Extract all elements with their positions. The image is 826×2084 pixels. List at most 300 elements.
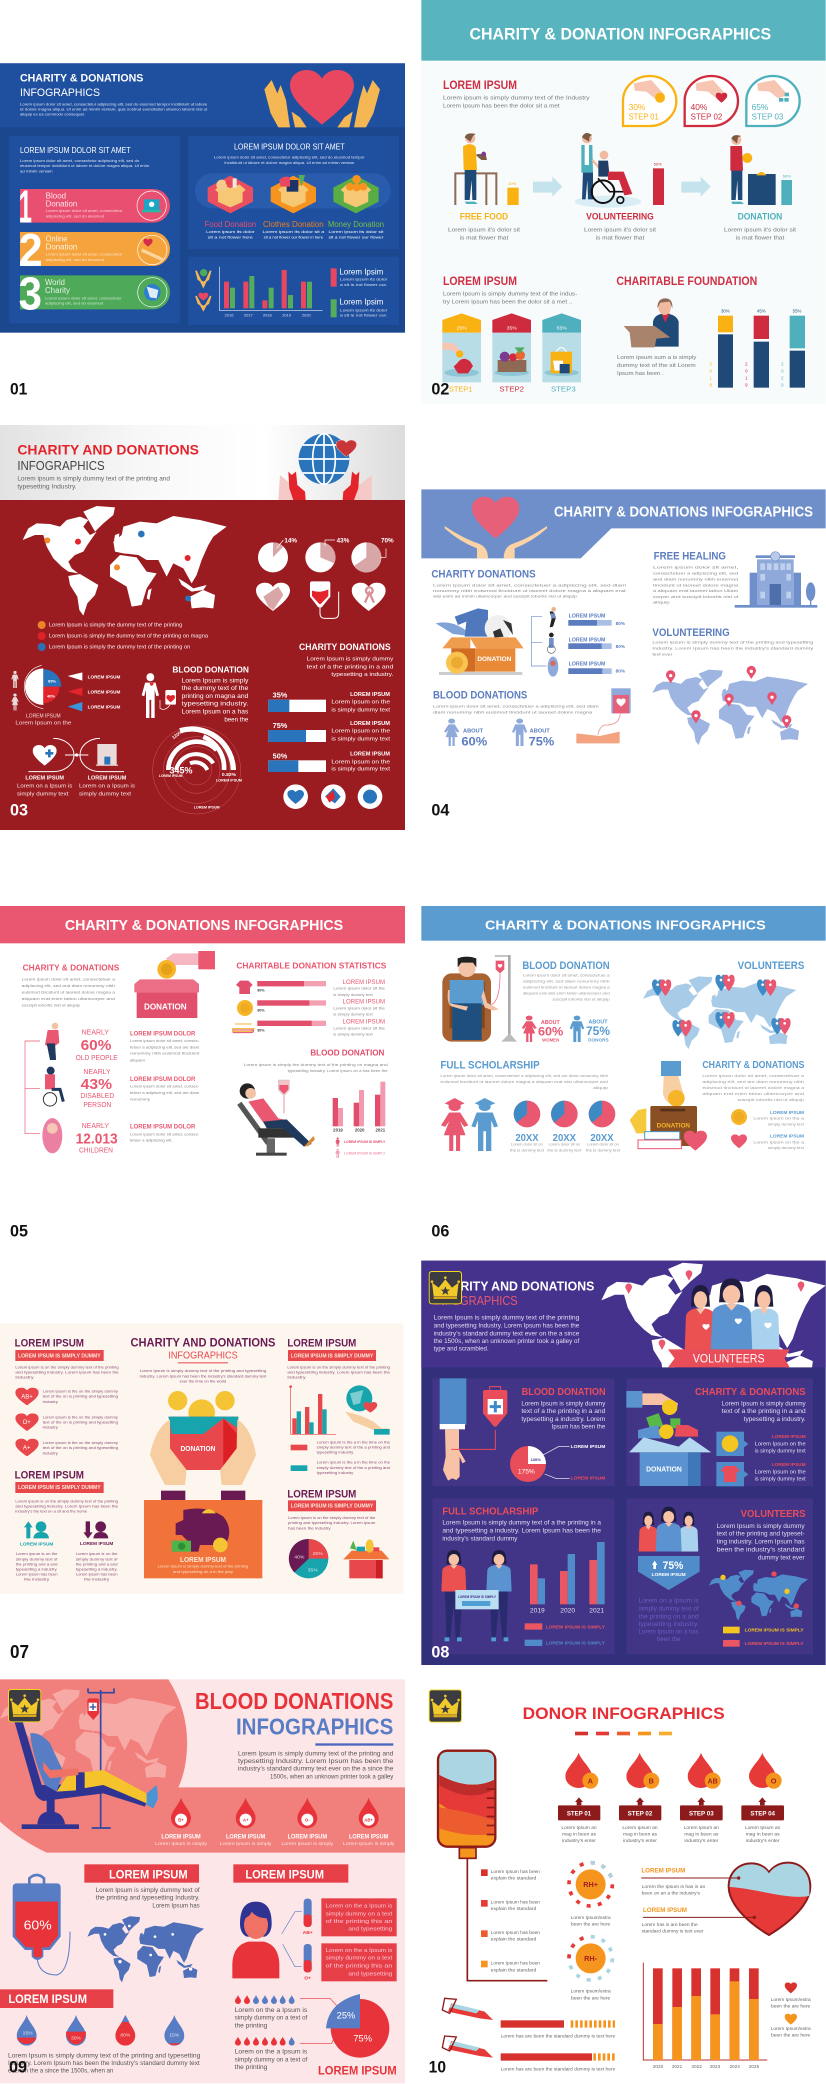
pie charts with years: Lorem dolor sit on [511,1143,543,1147]
text block: charity and donations: suscipit lobortis nisl ut aliquip [22,1002,81,1007]
blood type drops: AB+ [364,1817,374,1822]
half pie with persons: Lorem Ipsum on the [15,721,71,727]
figure: volunteering [575,133,664,208]
card: volunteers: LOREM IPSUM IS SIMPLY [745,1641,804,1647]
figure: free food [455,133,519,205]
card: blood donation: BLOOD DONATION [522,1387,606,1398]
step badges: STEP 02 [691,111,723,121]
foundation text: dummy text of the sit Lorem [617,363,696,369]
pill: online donation: adipiscing elit, sed do eiusmod [46,258,104,262]
blood type drops: LOREM IPSUM [288,1834,327,1840]
captions for the three activities: DONATION [738,212,783,222]
progress bars: 75% [273,721,288,730]
orange card with piggy bank [144,1491,262,1578]
three stats with bracket: 80% [616,621,626,626]
donation captions: Lorem ipsum its dolor sit [328,230,383,234]
coin and heart legend: Lorem ipsum on the a [753,1117,805,1121]
text block: charity and donations [22,962,120,1007]
number 07: 07 [10,1642,29,1662]
three stats with bracket: LOREM IPSUM [569,662,606,668]
text block: lorem ipsum lower: LOREM IPSUM [443,274,517,288]
drop rows and pie chart: LOREM IPSUM [318,2064,397,2077]
title [523,1704,725,1735]
bar chart: 2018 [263,313,273,318]
text block: blood donation: printing on magna and [182,694,248,700]
text block: lorem ipsum lower [443,274,577,305]
banner with figure: lorem ipsum [232,1864,397,1981]
card: full scholarship: and typesetting a industry. Lorem Ipsum has been the [442,1529,602,1535]
stats text: NEARLY [82,1121,109,1130]
bar chart with legend: LOREM IPSUM IS SIMPLY [344,1140,386,1144]
icon: globe with heart and hands [278,434,372,500]
three stats with bracket: 80% [616,644,626,649]
step 1 house [442,313,481,394]
right section: bar chart: industry [287,1375,306,1380]
pill: blood donation: Blood [46,191,66,200]
pill: online donation: 2 [19,224,43,276]
text block: free healing: FREE HEALING [654,550,726,562]
blood type steps: A [588,1776,594,1785]
pill: online donation: Lorem ipsum dolor sit amet, consectetur [46,253,123,257]
icons: hands holding globe and heart [196,269,211,310]
card: charity and donations [626,1378,813,1486]
text block: free healing: Lorem ipsum dolor sit amet, [653,565,738,570]
blood type drops: LOREM IPSUM [226,1834,265,1840]
pie charts with years: 20XX [515,1133,539,1144]
bar chart: LOREM IPSUM IS SIMPLY [546,1624,606,1630]
bag legend: explain the standard [491,1906,537,1911]
donation captions: Money Donation [328,220,384,229]
dolor text blocks: LOREM IPSUM DOLOR [130,1076,195,1083]
left section: donors: industry's the text on a sit and the home [15,1509,88,1514]
card: volunteers: been the [657,1637,681,1643]
bar chart: 2019 [530,1608,545,1615]
text block: charity and donations: aliquam erat enim tation ullamcorper and [22,996,115,1001]
card: full scholarship [432,1498,615,1654]
dolor text blocks: nonummy [130,1097,150,1102]
card: volunteers: typesetting industry. [639,1622,699,1628]
chart legend: been the are here [771,2033,811,2038]
radial chart: 345% [170,765,192,775]
stacked bars: 1 [709,375,712,380]
banner with figure: lorem ipsum: AB+ [303,1930,313,1936]
chart legend: Lorem Ipsum/extra [771,1997,811,2002]
card: blood donation: 175% [518,1468,535,1475]
progress bars: LOREM IPSUM [350,751,390,757]
drop rows and pie chart: Lorem on the a Ipsum is [235,2049,307,2055]
bar chart with legend [333,1082,386,1158]
banner with drops: lorem ipsum: Industry. Lorem Ipsum has been the Industry's standard dummy text [8,2061,200,2067]
left section: blood types: Lorem ipsum is the on the simply dummy [43,1389,118,1394]
left section: blood types: and typesetting industry. Lorem Ipsum has been the [15,1369,120,1374]
text block: charity and donations: adipiscing elit, sed and diam nonummy nibh [22,983,115,988]
bar chart with legend: 2021 [376,1128,386,1133]
donation captions: sit a not flower our flower [328,235,385,239]
text block: full scholarship [440,1060,608,1090]
blood type steps: STEP 03 [689,1811,714,1818]
statistics: LOREM IPSUM [343,1019,385,1026]
left section: blood types: text of the on is printing and typesetting [43,1445,118,1450]
chart legend: been the are here [771,2004,811,2009]
donation captions: Lorem ipsum its dolor [206,230,256,234]
blood type steps: Lorem Ipsum an [622,1825,658,1830]
half pie with persons: 69% [48,679,56,684]
blood type steps: mag in been as [684,1832,719,1837]
blood type drops: O- [305,1817,310,1822]
bag legend: Lorem Ipsum has been [491,1869,540,1874]
header: industry's standard dummy text ever on the a since [434,1331,580,1337]
card: blood donation [432,1378,615,1486]
heart and hospital connector [17,738,135,798]
orange card with piggy bank: and typesetting on a in the play [173,1570,233,1574]
header [421,1260,826,1368]
left section: blood types [15,1338,120,1456]
text block: charity and donations: CHARITY & DONATIONS [23,962,120,972]
right section: pie chart and box: printing and typesetting industry. Lorem ipsum [288,1520,376,1525]
text block: charity donations [431,569,627,599]
pill: world charity: World [45,278,65,287]
right column heading: incididunt ut labore et dolore magna aliqua. Ut enim ad minim veniam [224,160,355,165]
left section: blood types: Lorem ipsum is on the simply dummy text of the printing [15,1364,119,1369]
header: the 1500s, when an unknown printer took a galley of [434,1339,580,1345]
number 09: 09 [9,2058,27,2077]
donor percentages: ABOUT [589,1019,608,1025]
icon: hospital [735,552,817,608]
right section: bar chart [287,1338,391,1475]
captions for the three activities: FREE FOOD [460,212,508,222]
arrow [681,177,711,197]
chart legend: Lorem Ipsum/extra [771,2026,811,2031]
bar chart: 2016 [225,313,234,318]
dolor text blocks [130,1031,200,1143]
statistics: LOREM IPSUM [343,979,385,986]
left section: donors: simply dummy text of [16,1556,58,1561]
figures: graduates [441,1098,498,1151]
half pie with persons: 40% [47,693,55,698]
right section: bar chart: LOREM IPSUM [287,1338,356,1350]
left section: blood types: industry [15,1375,34,1380]
icon: heart with level and callouts [641,1863,810,1935]
progress bars: LOREM IPSUM [350,692,390,698]
banner with figure: lorem ipsum: LOREM IPSUM [245,1867,324,1881]
half pie with persons: LOREM IPSUM [88,690,120,696]
text block: charity and donations: suscipit lobortis nisl ut aliquip [737,1098,804,1102]
heart and hospital connector: Lorem on a Ipsum is [79,784,135,790]
figures: three volunteers with ribbon: VOLUNTEERS [693,1352,764,1366]
drop rows and pie chart: 75% [353,2033,372,2043]
chart legend [331,267,388,318]
bar chart: LOREM IPSUM IS SIMPLY [546,1641,606,1647]
right section: pie chart and box: Lorem ipsum is on the simply dummy text of the [288,1515,376,1520]
right section: bar chart: LOREM IPSUM IS SIMPLY DUMMY [291,1353,374,1359]
radial chart: LOREM IPSUM [159,774,183,778]
left section: blood types: LOREM IPSUM [15,1338,84,1350]
text block: volunteering: industry. Lorem Ipsum has been the industry's standard dummy [652,646,813,651]
stacked bars: 9 [745,382,748,387]
text block: free healing: and diam nonummy nibh euismod [653,576,738,581]
text block: blood donation: been the [224,717,249,723]
stacked bar chart: 2025 [749,2064,760,2069]
figure: man in armchair with drip [442,955,517,1042]
left section: blood types: A+ [23,1445,31,1451]
icon: donation box: DONATION [477,656,512,663]
captions for the three activities: Lorem ipsum it's dolor sit [724,228,796,234]
statistics: is simply dummy text [333,1012,373,1016]
blood type drops: LOREM IPSUM [161,1834,201,1840]
foundation text [617,355,697,377]
bar chart: 2020 [560,1608,575,1615]
banner with drops: lorem ipsum: LOREM IPSUM [8,1992,87,2006]
center title: ever the time on the world [180,1378,226,1383]
center title: Lorem Ipsum is simply dummy text of the printing and typesetting [140,1368,266,1373]
icon: donation box with hand: DONATION [144,1001,187,1011]
figure: free food: 20% [508,181,517,186]
icon: heart with level and callouts: Lorem the Ipsum is has is an [642,1884,706,1889]
captions for the three activities: VOLUNTEERING [586,212,654,222]
bar chart: 2020 [302,313,312,318]
title: 1500s, when an unknown printer took a galley [270,1774,393,1780]
header: INFOGRAPHICS [434,1294,518,1308]
blood type steps: STEP 02 [628,1811,653,1818]
banner with figure: lorem ipsum: of the printing this an [326,1963,392,1969]
right section: pie chart and box: LOREM IPSUM [287,1488,356,1500]
left column heading [20,145,150,174]
header: Lorem Ipsum is simply dummy text of the printing [434,1315,579,1321]
icon: heart with level and callouts: LOREM IPSUM [643,1907,687,1914]
dolor text blocks: Lorem ipsum dolor sit amet, consec- [130,1084,200,1089]
text block: blood donation: aliquam erat wisi enim tation ullamcorper and [523,992,610,996]
panel 06: charity and donations, sky blue [421,906,826,1241]
RH plus and minus markers: RH- [584,1954,598,1963]
left section: donors: LOREM IPSUM [80,1541,113,1547]
banner with figure: lorem ipsum: and typesetting [348,1971,392,1977]
header: CHARITY & DONATIONS INFOGRAPHICS [65,918,343,934]
blood type steps: AB [708,1776,718,1785]
card: blood donation: typesetting a industry. Lorem [521,1417,605,1423]
card: full scholarship: Lorem Ipsum is simply dummy text of a the printing in a [442,1521,602,1527]
card: charity and donations: Lorem Ipsum on the [755,1442,806,1448]
step 3 house: 55% [557,326,567,332]
icon: heart with level and callouts: Lorem has is are been the [642,1922,698,1927]
title [20,73,208,117]
banner with drops: lorem ipsum: ever on the a since the 1500s, when an [8,2069,113,2075]
text block: charity and donations [702,1060,805,1102]
pill: world charity [19,267,170,319]
progress bars: 50% [273,752,288,761]
title: et dolore magna aliqua. Ut enim ad minim veniam, quis nostrud exercitation ullamco laboris nisi ut [20,107,208,112]
stacked bar chart: 2020 [653,2064,664,2069]
blood type steps: Lorem Ipsum an [561,1825,597,1830]
drop rows and pie chart: 25% [337,2011,355,2021]
foundation text: Lorem ipsum sum a is simply [617,355,697,361]
pill: blood donation: Donation [46,200,77,209]
text block: volunteering: VOLUNTEERING [652,627,730,639]
right column heading [214,142,365,165]
text block: charity donations [299,642,394,678]
stacked bars: 0 [781,382,784,387]
text block: blood donation [244,1048,388,1073]
coin and heart legend: LOREM IPSUM [770,1110,804,1116]
stacked bars: 45% [757,308,766,313]
stats text: 60% [81,1038,111,1054]
heart and hospital connector: LOREM IPSUM [25,776,65,782]
text block: blood donation: BLOOD DONATION [522,960,610,972]
card: full scholarship: FULL SCHOLARSHIP [442,1506,538,1517]
icon: heart with level and callouts: been on an a the industry's [642,1891,701,1896]
blood type drops: Lorem Ipsum is simply [281,1841,334,1846]
card: blood donation: text of a the printing in a and [521,1409,605,1415]
RH plus and minus markers: been the are here [571,1995,611,2000]
step badges: STEP 03 [752,111,784,121]
syringes with progress bars: Lorem has are been the standard dummy is text here [501,2034,616,2039]
text block: charity donations: CHARITY DONATIONS [431,569,536,581]
statistics: 80% [257,988,265,992]
donor percentages: 75% [586,1024,610,1038]
bar chart: 2019 [282,313,292,318]
people stats with bracket [25,1023,63,1153]
dolor text blocks: tetuer a adipiscing elit, sed are diam [130,1090,200,1095]
text block: full scholarship: Lorem ipsum dolor sit amet, consectetuer a adipiscing elit, sed are diam nonummy nibh [440,1074,608,1078]
card: charity and donations: is simply dummy text [755,1449,806,1455]
map legend: Lorem Ipsum is simply the dummy text of the printing on [49,645,190,651]
icon: hands with donation pouch and coins [150,1391,256,1485]
title: INFOGRAPHICS [236,1713,393,1739]
bar chart [220,267,323,318]
title: BLOOD DONATIONS [195,1688,393,1714]
blood type steps: B [649,1776,654,1785]
stats text: OLD PEOPLE [76,1053,118,1062]
header [421,906,826,941]
banner with figure: lorem ipsum: simply dummy on a text [326,1911,393,1917]
left section: blood types: O+ [23,1420,31,1426]
stats text: 12.013 [76,1131,118,1147]
left section: donors: Lorem ipsum has been [76,1572,117,1577]
drop rows and pie chart: the printing [235,2065,267,2071]
icon: hands with donation pouch and coins: DONATION [180,1444,215,1453]
donation captions [204,220,385,239]
donation captions: sit a not flower our flower in here [264,235,323,239]
card: blood donation: LOREM IPSUM [571,1475,605,1480]
card: charity and donations: LOREM IPSUM [772,1434,806,1439]
banner with drops: lorem ipsum: 15% [23,2030,33,2036]
stacked bar chart: 2022 [691,2064,702,2069]
text block: free healing: a aliquam erat laoreet tation Ullam [653,588,739,593]
blood type steps: Lorem Ipsum an [684,1825,719,1830]
world map with double pins [643,975,796,1049]
dolor text blocks: nonummy nibh euismod tincidunt [130,1051,200,1056]
blood type steps: O [771,1776,777,1785]
stats text: DISABLED [80,1091,114,1100]
title [17,442,199,490]
left section: donors: simply dummy text of [76,1556,118,1561]
text block: free healing: corper and suscipit lobortis nisl ut [653,594,740,599]
blood type steps: industry's enter [746,1838,780,1843]
icon: donation box, books and heart: DONATION [657,1123,690,1130]
pill: world charity: 3 [19,267,42,319]
text block: volunteering: text ever [652,651,673,656]
text block: blood donation: Lorem ipsum is simply the dummy text of the printing on magna and [244,1062,388,1067]
blood type steps: mag in been as [746,1832,780,1837]
text block: full scholarship: FULL SCHOLARSHIP [440,1060,540,1072]
figures: three volunteers with ribbon [668,1278,790,1367]
blood type steps: STEP 01 [567,1811,592,1818]
panel 04: charity and donations, periwinkle [421,489,826,820]
left section: donors: typesetting a industry. [16,1567,57,1572]
half pie with persons: LOREM IPSUM [88,674,120,680]
card: blood donation: Ipsum has been the [552,1425,606,1431]
pie charts with years: the is dummy text [547,1148,581,1152]
left section: donors: the industry [24,1577,49,1582]
title: CHARITY AND DONATIONS [17,442,199,458]
card: volunteers: VOLUNTEERS [741,1509,806,1520]
banner with figure: lorem ipsum: simply dummy on a text [326,1956,393,1962]
icon: donation box [436,608,524,675]
card: volunteers: ting industry. Lorem Ipsum has [717,1540,805,1546]
banner with figure: lorem ipsum: and typesetting [348,1927,392,1933]
header [421,0,826,61]
blood type steps: Lorem Ipsum an [745,1825,781,1830]
card: volunteers: text of the printing and typeset- [717,1532,805,1538]
progress bars: Lorem Ipsum on the [331,700,390,706]
stacked bars: 0 [781,369,784,374]
title: INFOGRAPHICS [20,87,100,99]
half pie with persons [11,665,120,727]
banner with figure: lorem ipsum: Lorem on the a Ipsum is [326,1948,393,1954]
card: charity and donations: CHARITY & DONATIONS [695,1387,806,1398]
header [0,906,405,943]
coin and heart legend: simply dummy text [768,1146,804,1150]
text block: charity donations: nonummy nibh euismod tincidunt ut laoreet dolore magna a aliquam erat [433,588,627,593]
drop rows and pie chart: the printing [235,2024,267,2030]
icon: heart with level and callouts: LOREM IPSUM [641,1867,685,1874]
text block: blood donations: diam nonummy nibh euismod tincidunt ut laoreet dolore magna [433,709,593,714]
text block: blood donations [433,690,600,749]
banner with text: lorem ipsum: LOREM IPSUM [109,1867,188,1881]
statistics: LOREM IPSUM [343,999,385,1006]
pie charts: 14% [284,538,297,545]
header [421,489,826,558]
foundation text: Ipsum has been . [617,371,664,377]
progress bars: Lorem Ipsum on the [331,729,390,735]
map legend: Lorem Ipsum is simply the dummy text of the printing on magna [49,634,209,640]
stacked bars: 1 [745,375,748,380]
statistics: 80% [257,1008,265,1012]
right section: bar chart: Lorem ipsum is the a in the time on the [317,1460,391,1465]
left section: blood types: industry [43,1450,58,1455]
captions for the three activities: is mat flower that [596,235,645,241]
card: full scholarship: industry's standard dummy [442,1536,517,1542]
bar chart: 2017 [244,313,254,318]
dolor text blocks: tetuer a adipiscing elit. [130,1138,173,1143]
left column heading: Lorem ipsum dolor sit amet, consectetur adipiscing elit, sed do [20,158,140,163]
stats text [76,1028,118,1155]
text block: blood donations: BLOOD DONATIONS [433,690,527,702]
center title [130,1336,276,1383]
heart and hospital connector: simply dummy text [17,792,69,798]
card: volunteers: 75% [663,1560,683,1572]
captions for the three activities: Lorem ipsum it's dolor sit [448,228,520,234]
progress bars: is simply dummy text [331,737,390,743]
text block: blood donation: euismod tincidunt ut laoreet dolore magna a [523,986,611,990]
banner with drops: lorem ipsum: 80% [120,2033,131,2039]
card: volunteers [626,1498,813,1654]
stats text: NEARLY [82,1028,109,1037]
right section: pie chart and box: 25% [313,1551,323,1557]
heading: charitable foundation: CHARITABLE FOUNDATION [616,274,757,288]
donor percentages: ABOUT [541,1020,561,1026]
pie charts [258,538,394,572]
statistics: Lorem ipsum dolor sit the [333,1026,385,1030]
